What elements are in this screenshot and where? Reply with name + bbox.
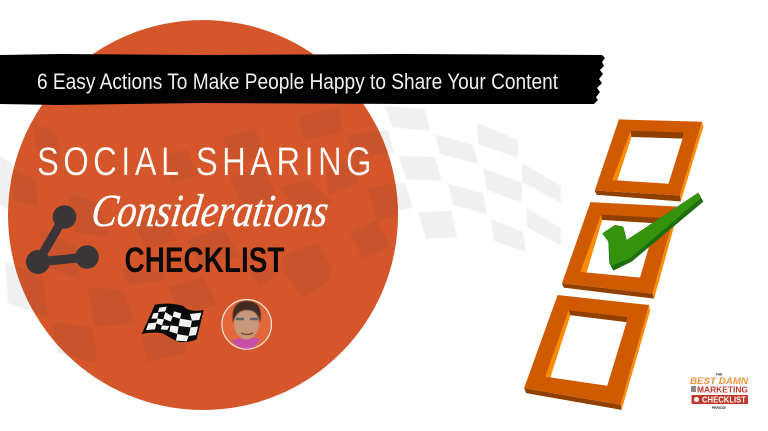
logo: best damn marketing checklist: MARKETING [697, 384, 748, 394]
heading: social sharing: SOCIAL SHARING [37, 139, 372, 184]
heading: considerations: Considerations [89, 185, 332, 236]
checkbox 2 [562, 202, 678, 299]
icon: share network [26, 205, 99, 274]
icon: green check mark [602, 193, 703, 271]
logo: best damn marketing checklist [690, 372, 749, 410]
background checkered flag pattern [0, 106, 561, 362]
heading: checklist: CHECKLIST [124, 241, 284, 280]
avatar photo [222, 300, 272, 349]
checkbox 1 [595, 119, 703, 202]
icon: checkbox stack [524, 119, 703, 410]
checkered pattern inside circle [5, 107, 400, 362]
orange circle [8, 20, 398, 410]
banner: subtitle [0, 54, 605, 105]
logo: best damn marketing checklist: THE [716, 372, 723, 376]
icon: checkered flag [142, 304, 204, 342]
logo: best damn marketing checklist: PERIOD! [712, 406, 726, 410]
checkbox 3 [524, 295, 650, 410]
banner: subtitle: 6 Easy Actions To Make People Happy to Share Your Content [37, 69, 558, 94]
logo: best damn marketing checklist: BEST DAMN [690, 376, 749, 387]
logo: best damn marketing checklist: CHECKLIST [702, 396, 746, 404]
